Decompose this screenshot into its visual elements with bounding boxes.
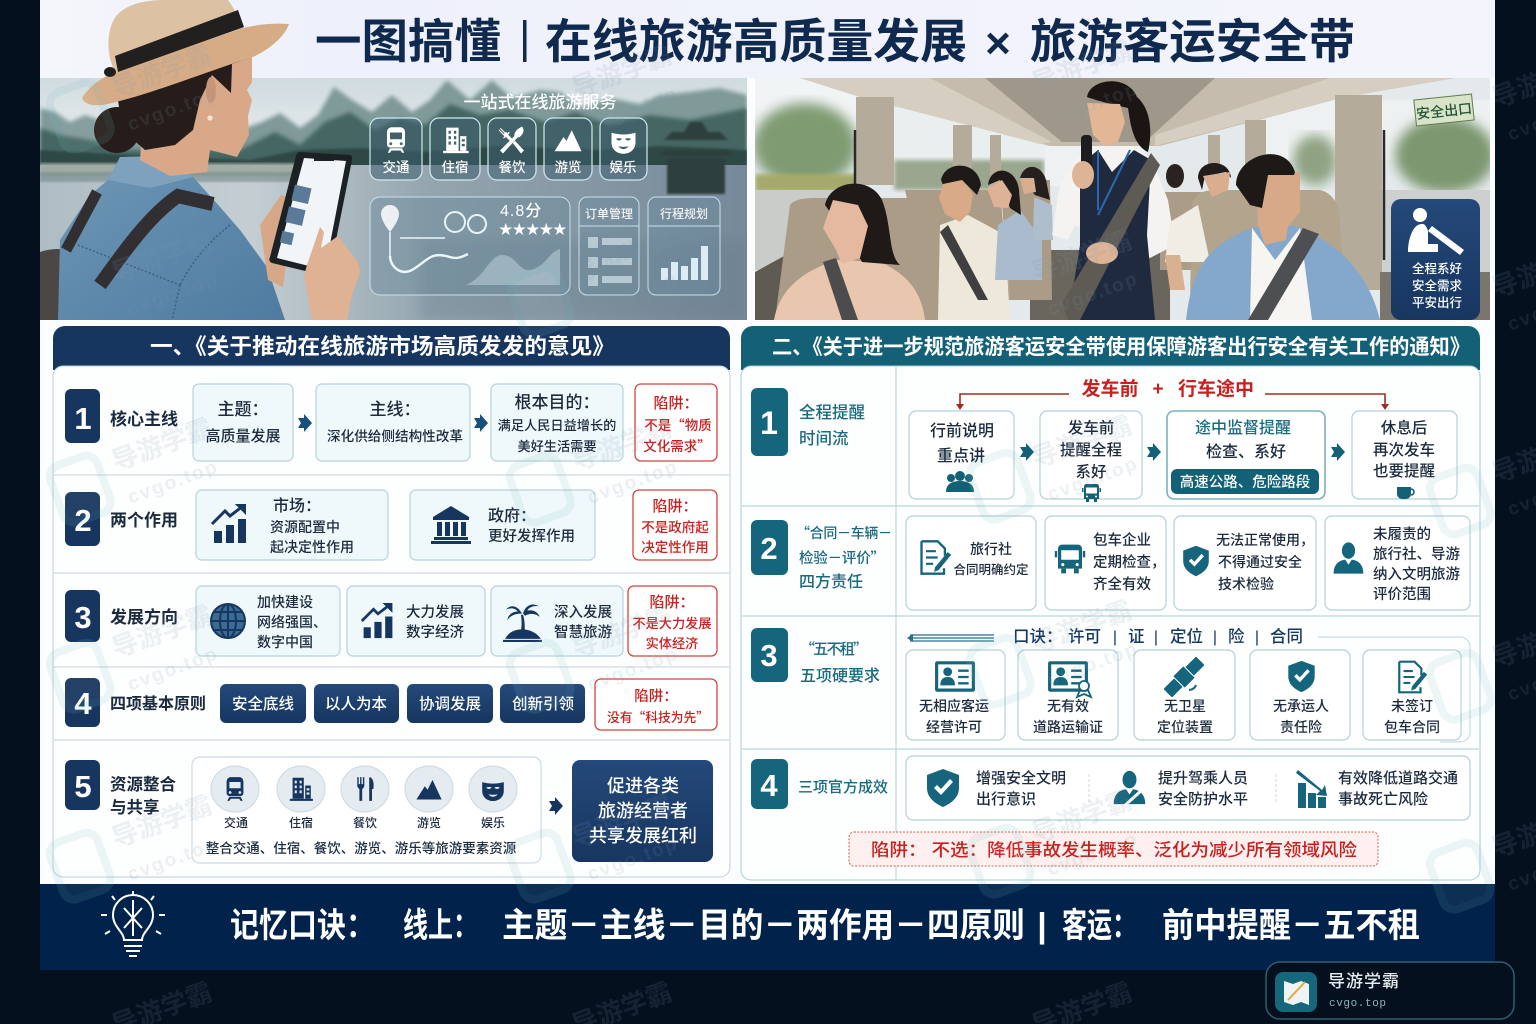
heading: panel two: 二、《关于进一步规范旅游客运安全带使用保障游客出行安全有关工作的通知》	[772, 335, 1470, 359]
row 1: full-journey reminders: 再次发车	[1373, 441, 1435, 459]
row 1: full-journey reminders: 发车前	[1068, 419, 1114, 437]
watermark layer: cvgo.top	[1045, 638, 1141, 691]
row 2: four-party responsibility: 定期检查，	[1093, 553, 1166, 571]
row 3: five no-rent rules: 经营许可	[926, 719, 982, 735]
icon: globe	[211, 604, 245, 638]
watermark layer: cvgo.top	[585, 643, 681, 696]
row 4: three official results: 出行意识	[976, 790, 1036, 808]
row 1: full-journey reminders: 提醒全程	[1060, 440, 1122, 459]
row 2: four-party responsibility: 无法正常使用，	[1216, 532, 1314, 548]
title: 在线旅游高质量发展	[545, 15, 967, 68]
text: memory line: 线上：	[403, 907, 478, 945]
text: memory line: 记忆口诀：	[230, 907, 375, 945]
row 2: four-party responsibility: 包车企业	[1093, 531, 1151, 549]
row 1: full-journey reminders: 休息后	[1381, 418, 1427, 437]
row 2: four-party responsibility: 检验－评价”	[799, 547, 885, 568]
row 1: full-journey reminders	[751, 377, 1457, 502]
row 3: five no-rent rules: 道路运输证	[1033, 719, 1103, 735]
row 4: three official results: 增强安全文明	[976, 769, 1066, 787]
row 3: five no-rent rules: 无卫星	[1164, 698, 1206, 714]
row 1: core mainline: 高质量发展	[205, 428, 281, 445]
row 3: five no-rent rules: 无相应客运	[919, 698, 989, 714]
title: 一图搞懂	[315, 15, 501, 68]
callout: trap warning	[849, 832, 1378, 866]
row 2: four-party responsibility: “合同－车辆－	[796, 523, 892, 543]
row 5: resource integration: 5	[74, 769, 92, 804]
row 3: five no-rent rules: 许可	[1068, 627, 1101, 646]
row 3: development directions: 不是大力发展	[632, 616, 712, 631]
row 3: development directions: 实体经济	[646, 635, 698, 651]
row 2: two roles: 更好发挥作用	[488, 528, 575, 545]
watermark layer: cvgo.top	[125, 268, 221, 321]
row 5: resource integration: 共享发展红利	[589, 826, 697, 846]
row 4: three official results: 4	[760, 768, 778, 803]
row 1: full-journey reminders: 重点讲	[937, 447, 985, 465]
row 2: four-party responsibility: 合同明确约定	[953, 562, 1029, 577]
row 5: resource integration: 与共享	[110, 797, 160, 817]
icon: coffee cup	[1397, 487, 1414, 499]
row 3: five no-rent rules	[751, 626, 1470, 742]
title: ×	[985, 19, 1011, 68]
row 3: development directions: 陷阱：	[649, 594, 695, 611]
service tiles	[370, 118, 647, 180]
row 2: four-party responsibility: 纳入文明旅游	[1373, 565, 1460, 583]
service tiles: 游览	[554, 160, 582, 175]
row 1: full-journey reminders: 时间流	[799, 429, 848, 448]
panel: online tourism opinion	[53, 326, 730, 877]
watermark layer: 导游学霸	[1028, 35, 1136, 98]
row 1: full-journey reminders: 系好	[1075, 463, 1107, 481]
row 1: full-journey reminders: 行前说明	[930, 422, 994, 440]
row 1: core mainline: 文化需求”	[643, 435, 711, 455]
row 3: five no-rent rules: |	[1113, 629, 1117, 646]
watermark layer: cvgo.top	[1045, 453, 1141, 506]
logo badge: cvgo.top	[1329, 998, 1387, 1010]
seatbelt badge: 平安出行	[1412, 295, 1462, 310]
row 1: core mainline: 深化供给侧结构性改革	[327, 428, 463, 444]
icon: light bulb	[101, 891, 165, 956]
dashboard glass panels: 4.8分	[500, 202, 542, 220]
row 1: core mainline: 美好生活需要	[517, 438, 597, 454]
text: one-stop services caption: 一站式在线旅游服务	[464, 93, 616, 112]
row 3: development directions	[65, 586, 717, 656]
row 1: full-journey reminders: 途中监督提醒	[1195, 418, 1291, 437]
dashboard glass panels: 订单管理	[585, 206, 633, 221]
watermark layer: cvgo.top	[585, 456, 681, 509]
watermark layer: cvgo.top	[125, 833, 221, 886]
row 1: core mainline: 根本目的：	[514, 393, 600, 412]
row 2: two roles: 两个作用	[110, 511, 178, 530]
watermark layer: cvgo.top	[1045, 78, 1141, 131]
row 2: four-party responsibility: 技术检验	[1218, 576, 1274, 592]
row 2: four-party responsibility: 四方责任	[799, 572, 863, 591]
passenger man front right	[1186, 154, 1380, 320]
row 2: two roles: 起决定性作用	[270, 539, 354, 555]
row 4: three official results: 安全防护水平	[1158, 790, 1248, 808]
row 5: resource integration: 游览	[417, 815, 441, 830]
seatbelt badge: 全程系好	[1412, 261, 1462, 276]
row 2: four-party responsibility: 未履责的	[1373, 526, 1431, 543]
row 4: four principles: 陷阱：	[634, 688, 678, 705]
service tiles: 交通	[382, 159, 410, 175]
row 1: core mainline: 主题：	[218, 400, 268, 419]
window scenery	[755, 78, 858, 130]
row 3: five no-rent rules: 无承运人	[1273, 698, 1329, 714]
watermark layer: 导游学霸	[568, 600, 676, 663]
service tiles: 餐饮	[498, 159, 526, 175]
row 1: full-journey reminders: 全程提醒	[799, 402, 865, 422]
row 5: resource integration: 促进各类	[607, 776, 679, 796]
watermark layer: cvgo.top	[585, 83, 681, 136]
row 5: resource integration: 整合交通、住宿、餐饮、游览、游乐等旅游要素资源	[206, 840, 517, 856]
watermark layer: 导游学霸	[568, 225, 676, 288]
icon: certificate ribbon	[1077, 681, 1091, 697]
watermark layer: 导游学霸	[108, 600, 216, 663]
watermark layer: cvgo.top	[585, 833, 681, 886]
watermark layer: cvgo.top	[125, 83, 221, 136]
row 2: two roles: 不是政府起	[641, 519, 709, 535]
logo badge: 导游学霸	[1328, 971, 1400, 991]
top banner band	[40, 0, 1495, 78]
watermark layer: cvgo.top	[1045, 828, 1141, 881]
photo: tour bus interior with attendant	[753, 78, 1495, 320]
watermark layer: 导游学霸	[568, 40, 676, 103]
row 3: five no-rent rules: |	[1154, 629, 1158, 646]
passenger man second	[938, 166, 1010, 320]
row 3: five no-rent rules: 合同	[1270, 627, 1303, 646]
text: memory line	[230, 898, 1420, 947]
row 3: five no-rent rules: 五项硬要求	[800, 667, 880, 685]
service tiles: 娱乐	[610, 160, 637, 175]
row 1: core mainline: 满足人民日益增长的	[498, 417, 616, 433]
row 3: five no-rent rules: 定位	[1170, 626, 1203, 646]
watermark layer: 导游学霸	[108, 40, 216, 103]
row 3: five no-rent rules: 口诀：	[1013, 627, 1062, 646]
row 3: five no-rent rules: 未签订	[1391, 698, 1433, 714]
row 3: five no-rent rules: 险	[1228, 627, 1245, 646]
row 3: development directions: 数字中国	[257, 634, 313, 650]
row 1: full-journey reminders: 1	[760, 405, 778, 441]
row 4: three official results: 有效降低道路交通	[1338, 769, 1458, 787]
row 4: four principles: 4	[74, 686, 92, 721]
row 3: five no-rent rules: 责任险	[1280, 719, 1322, 735]
seatbelt badge: 安全需求	[1412, 278, 1462, 293]
row 1: full-journey reminders: 行车途中	[1178, 377, 1254, 400]
row 5: resource integration: 住宿	[289, 815, 313, 830]
row 4: four principles: 协调发展	[419, 695, 481, 713]
text: memory line: 前中提醒－五不租	[1162, 898, 1420, 947]
callout: trap warning: 陷阱： 不选：降低事故发生概率、泛化为减少所有领域风险	[871, 840, 1358, 860]
sign: safety exit: 安全出口	[1415, 100, 1473, 122]
row 3: five no-rent rules: |	[1255, 629, 1259, 646]
passenger woman front	[774, 184, 925, 320]
row 1: core mainline: 主线：	[370, 400, 420, 419]
row 5: resource integration: 旅游经营者	[598, 801, 688, 821]
row 4: four principles: 四项基本原则	[110, 695, 206, 713]
row 3: five no-rent rules: 证	[1128, 627, 1144, 646]
icon: group of people	[946, 471, 974, 492]
row 5: resource integration: 娱乐	[481, 816, 505, 830]
row 1: full-journey reminders: 检查、系好	[1206, 443, 1286, 461]
row 4: four principles: 创新引领	[512, 695, 574, 713]
row 3: five no-rent rules: 包车合同	[1384, 719, 1440, 735]
title: 旅游客运安全带	[1030, 15, 1355, 68]
ceiling	[800, 78, 1455, 146]
row 3: five no-rent rules: “五不租”	[800, 638, 868, 659]
watermark layer: 导游学霸	[1028, 225, 1136, 288]
row 1: core mainline: 陷阱：	[653, 395, 699, 412]
logo badge	[1266, 962, 1514, 1019]
row 2: four-party responsibility: 旅行社	[970, 541, 1012, 557]
row 1: core mainline	[65, 384, 717, 461]
row 1: full-journey reminders: 发车前	[1081, 377, 1139, 400]
title	[315, 15, 1355, 68]
row 2: two roles: 政府：	[488, 506, 536, 525]
row 4: four principles: 以人为本	[325, 695, 387, 713]
row 4: four principles	[65, 678, 717, 730]
watermark layer: 导游学霸	[1028, 785, 1136, 848]
text: memory line: 客运：	[1062, 907, 1137, 945]
seatbelt badge	[1391, 199, 1480, 320]
row 2: two roles	[65, 490, 717, 560]
row 2: two roles: 市场：	[273, 496, 321, 515]
service tiles: 住宿	[442, 159, 468, 175]
dashboard glass panels: ★★★★★	[499, 222, 566, 237]
row 5: resource integration: 餐饮	[353, 815, 377, 830]
row 2: two roles: 资源配置中	[270, 519, 340, 535]
row 4: three official results	[751, 756, 1470, 820]
watermark layer: 导游学霸	[108, 413, 216, 476]
row 3: five no-rent rules: 3	[760, 638, 778, 673]
row 3: five no-rent rules: 定位装置	[1157, 719, 1213, 735]
row 5: resource integration: 交通	[224, 815, 248, 830]
watermark layer: 导游学霸	[1028, 410, 1136, 473]
row 2: four-party responsibility: 齐全有效	[1093, 575, 1151, 593]
heading: panel one: 一、《关于推动在线旅游市场高质发发的意见》	[150, 334, 615, 359]
row 5: resource integration	[65, 757, 713, 863]
icon: person wearing seatbelt	[1114, 771, 1145, 808]
row 3: development directions: 智慧旅游	[554, 623, 612, 641]
row 5: resource integration: 资源整合	[110, 774, 176, 794]
row 4: three official results: 三项官方成效	[798, 778, 888, 796]
row 3: development directions: 加快建设	[257, 594, 313, 610]
watermark layer: cvgo.top	[1045, 268, 1141, 321]
row 3: development directions: 网络强国、	[257, 614, 327, 630]
watermark layer: 导游学霸	[108, 790, 216, 853]
sign: safety exit	[1414, 94, 1474, 126]
seats	[775, 180, 1222, 320]
row 3: development directions: 3	[74, 600, 92, 635]
panel: coach seatbelt notice	[741, 326, 1480, 880]
row 1: core mainline: 1	[74, 401, 92, 436]
icon: falling risk chart	[1296, 770, 1327, 808]
row 3: development directions: 发展方向	[110, 607, 178, 627]
watermark layer: 导游学霸	[108, 225, 216, 288]
row 2: two roles: 决定性作用	[641, 539, 709, 555]
watermark layer: cvgo.top	[125, 456, 221, 509]
watermark layer: 导游学霸	[568, 413, 676, 476]
row 3: development directions: 大力发展	[406, 604, 464, 621]
text: memory line: |	[1037, 907, 1047, 945]
passengers behind	[987, 167, 1053, 280]
watermark layer: cvgo.top	[125, 643, 221, 696]
curtains	[856, 95, 1382, 290]
row 2: four-party responsibility	[751, 516, 1470, 610]
row 2: four-party responsibility: 2	[760, 531, 778, 566]
woman with hat	[40, 0, 360, 320]
row 2: two roles: 2	[74, 503, 92, 538]
row 3: five no-rent rules: |	[1213, 629, 1217, 646]
pavilion	[659, 122, 733, 194]
watermark layer: cvgo.top	[585, 268, 681, 321]
row 3: development directions: 数字经济	[406, 623, 464, 641]
watermark layer: 导游学霸	[1028, 595, 1136, 658]
text: memory line: 主题－主线－目的－两作用－四原则	[502, 898, 1025, 947]
row 1: core mainline: 不是“物质	[644, 414, 712, 434]
footer band: memory formula	[40, 884, 1495, 970]
attendant standing with microphone	[1052, 81, 1175, 320]
row 4: three official results: 事故死亡风险	[1338, 790, 1428, 808]
row 2: four-party responsibility: 不得通过安全	[1218, 554, 1302, 570]
dashboard glass panels: 行程规划	[660, 206, 708, 221]
row 4: three official results: 提升驾乘人员	[1158, 769, 1248, 787]
row 3: five no-rent rules: 无有效	[1047, 698, 1089, 714]
passengers right back	[1165, 163, 1231, 290]
photo: traveller with phone and lake landscape	[40, 0, 747, 320]
row 2: four-party responsibility: 旅行社、导游	[1373, 546, 1460, 563]
row 3: development directions: 深入发展	[554, 604, 612, 621]
row 2: two roles: 陷阱：	[652, 498, 698, 515]
row 4: four principles: 安全底线	[232, 694, 294, 713]
watermark layer: 导游学霸	[568, 790, 676, 853]
row 2: four-party responsibility: 评价范围	[1373, 586, 1431, 603]
row 1: core mainline: 核心主线	[110, 409, 178, 429]
row 1: full-journey reminders: +	[1152, 379, 1164, 400]
row 1: full-journey reminders: 也要提醒	[1373, 462, 1435, 480]
row 4: four principles: 没有“科技为先”	[607, 707, 709, 726]
row 1: full-journey reminders: 高速公路、危险路段	[1180, 473, 1310, 491]
dashboard glass panels	[370, 197, 720, 295]
